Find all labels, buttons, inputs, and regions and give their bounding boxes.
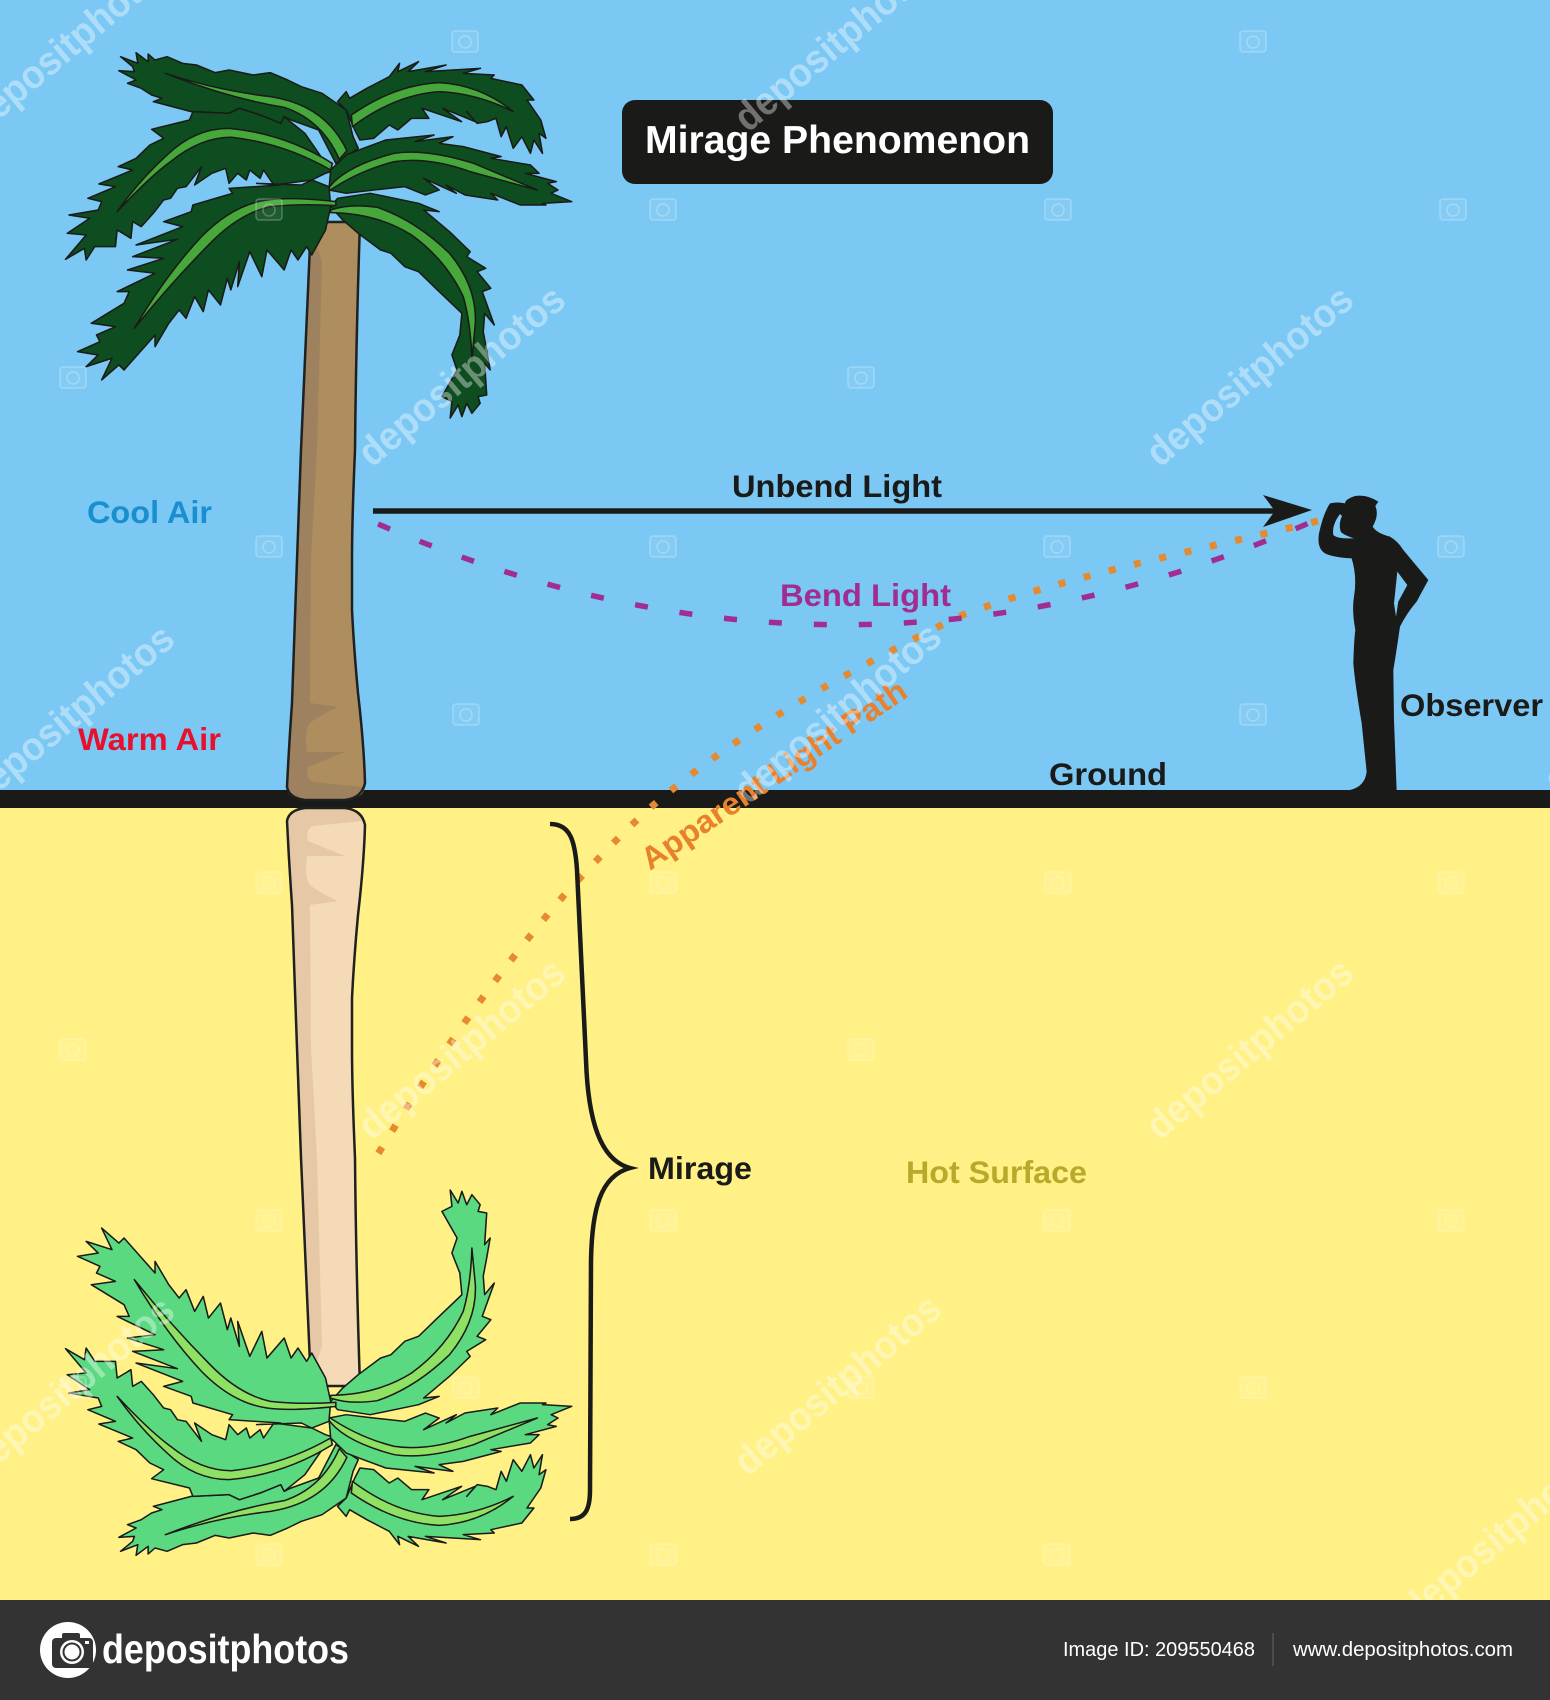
label: apparent light path: Apparent Light Path <box>634 672 913 877</box>
label: cool air: Cool Air <box>87 494 212 530</box>
ground line <box>0 790 1550 808</box>
label: mirage: Mirage <box>648 1150 752 1186</box>
palm crown fronds <box>65 53 572 418</box>
logo wordmark: depositphotos <box>102 1626 349 1672</box>
watermark overlay: depositphotos <box>725 1286 950 1484</box>
palm tree (real) <box>65 53 572 800</box>
brace marking mirage extent <box>550 824 630 1519</box>
watermark overlay: depositphotos <box>725 614 950 812</box>
watermark overlay: depositphotos <box>1137 950 1362 1148</box>
image id: Image ID: 209550468 <box>1063 1639 1255 1661</box>
mirage crown fronds <box>65 1190 572 1555</box>
watermark overlay: depositphotos <box>1137 277 1362 475</box>
watermark overlay: depositphotos <box>349 277 574 475</box>
label: observer: Observer <box>1400 687 1543 723</box>
footer bar <box>0 1600 1550 1700</box>
title: Mirage Phenomenon <box>645 119 1030 162</box>
label: bend light: Bend Light <box>780 577 952 613</box>
bend light dashed curve <box>378 519 1318 625</box>
watermark overlay: depositphotos <box>349 950 574 1148</box>
background: sky (cool air) <box>0 0 1550 790</box>
title <box>622 100 1053 184</box>
unbend light arrow <box>373 495 1312 527</box>
label: warm air: Warm Air <box>78 721 221 757</box>
mirage trunk <box>287 808 365 1386</box>
label: ground: Ground <box>1049 756 1167 792</box>
icon: observer silhouette <box>1318 496 1428 807</box>
tree trunk <box>287 222 365 800</box>
website address: www.depositphotos.com <box>1292 1639 1513 1661</box>
label: unbend light: Unbend Light <box>732 468 943 504</box>
background: hot surface <box>0 808 1550 1600</box>
apparent light path dotted line <box>372 521 1318 1164</box>
icon: depositphotos logo <box>40 1622 96 1678</box>
label: hot surface: Hot Surface <box>906 1154 1087 1190</box>
mirage palm tree (inverted reflection) <box>65 808 572 1555</box>
